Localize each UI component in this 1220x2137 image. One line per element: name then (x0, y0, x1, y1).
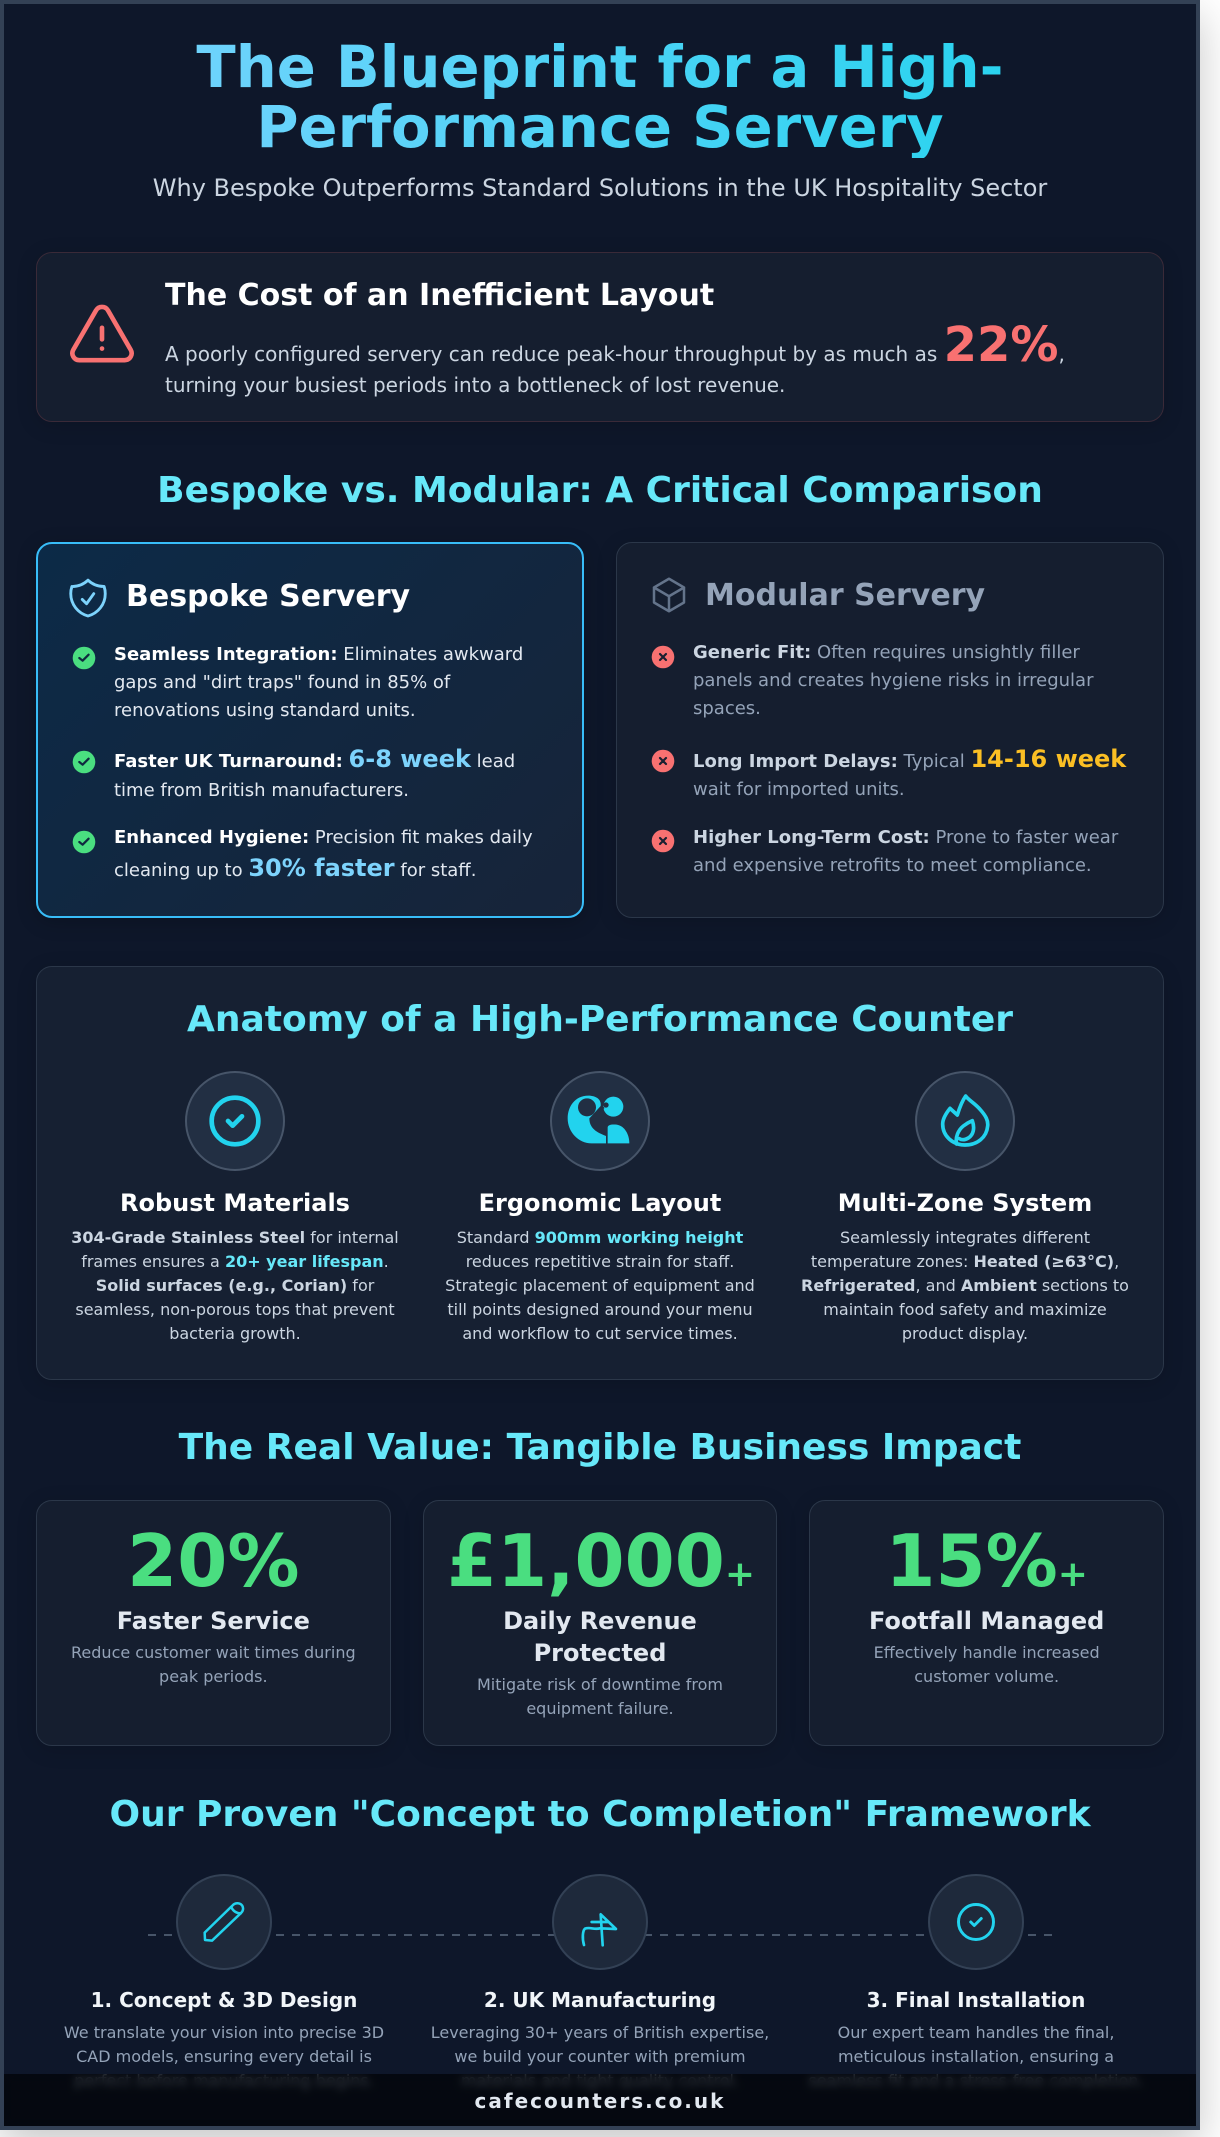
number: 15%+: 15%+ (885, 1519, 1088, 1603)
step: final installation (776, 1870, 1176, 2110)
icon: check (72, 750, 96, 774)
icon: warning triangle (70, 304, 134, 362)
text: step 1: perfect before manufacturing begins. (74, 2071, 374, 2090)
step: UK manufacturing (431, 1874, 769, 2090)
heading: real value: The Real Value: Tangible Business Impact (179, 1427, 1021, 1468)
text: generic fit (693, 642, 1094, 719)
stat card: daily revenue (423, 1500, 777, 1746)
icon: check (72, 646, 96, 670)
step: concept and design (64, 1874, 384, 2090)
text: step 3: meticulous installation, ensuring a (838, 2047, 1114, 2066)
feature: ergonomic layout (445, 1071, 755, 1343)
text: robust materials: seamless, non-porous tops that prevent (75, 1300, 395, 1319)
text: robust materials: frames ensures a 20+ year lifespan. (81, 1252, 389, 1271)
list item: faster UK turnaround (72, 745, 515, 801)
text: daily revenue: equipment failure. (526, 1699, 674, 1718)
text: seamless integration: renovations using standard units. (114, 700, 416, 721)
text: higher long-term cost: Higher Long-Term Cost: Prone to faster wear (693, 827, 1118, 848)
panel: modular servery (616, 542, 1164, 918)
text: long import delays: Long Import Delays: Typical 14-16 week (693, 745, 1126, 773)
heading: bespoke: Bespoke Servery (126, 579, 410, 614)
text: step 1: We translate your vision into precise 3D (64, 2023, 384, 2042)
number: £1,000+: £1,000+ (447, 1519, 755, 1603)
label: daily revenue protected (503, 1607, 697, 1667)
icon: manufacturing badge (552, 1874, 648, 1970)
text: enhanced hygiene: cleaning up to 30% faster for staff. (114, 854, 476, 882)
footer (4, 2074, 1196, 2126)
list item: generic fit (652, 642, 1094, 719)
icon: cube (652, 578, 686, 612)
subtitle: Why Bespoke Outperforms Standard Solutions in the UK Hospitality Sector (153, 174, 1047, 202)
text: faster service (71, 1643, 356, 1686)
text: ergonomic layout (445, 1228, 755, 1343)
heading: multi-zone system: Multi-Zone System (838, 1189, 1092, 1217)
text: ergonomic layout: Standard 900mm working height (457, 1228, 743, 1247)
text: step 3: Our expert team handles the final, (838, 2023, 1114, 2042)
text: footfall: Effectively handle increased (874, 1643, 1100, 1662)
icon: check circle badge (928, 1874, 1024, 1970)
text: faster UK turnaround (114, 745, 515, 801)
icon: cross (652, 646, 674, 668)
text: robust materials (71, 1228, 399, 1343)
text: higher long-term cost (693, 827, 1118, 876)
heading: ergonomic layout: Ergonomic Layout (479, 1189, 721, 1217)
icon: cross (652, 830, 674, 852)
text: robust materials: Solid surfaces (e.g., Corian) for (96, 1276, 374, 1295)
label: faster service: Faster Service (117, 1607, 310, 1635)
heading: step 3: 3. Final Installation (867, 1988, 1085, 2012)
text: footfall: customer volume. (914, 1667, 1059, 1686)
text: enhanced hygiene: Enhanced Hygiene: Precision fit makes daily (114, 827, 533, 848)
stat card: footfall (809, 1500, 1164, 1746)
text: multi-zone system: product display. (902, 1324, 1028, 1343)
stat card: faster service (36, 1500, 391, 1746)
icon: cross (652, 750, 674, 772)
heading: anatomy: Anatomy of a High-Performance Counter (187, 999, 1013, 1040)
label: daily revenue protected: Protected (534, 1639, 666, 1667)
text: daily revenue (477, 1675, 723, 1718)
text: step 1: CAD models, ensuring every detail is (76, 2047, 372, 2066)
icon: flame badge (915, 1071, 1015, 1171)
text: cost explanation: turning your busiest periods into a bottleneck of lost revenue. (165, 373, 785, 397)
text: step 2 (431, 2023, 769, 2090)
text: step 2: we build your counter with premium (454, 2047, 746, 2066)
heading: framework: Our Proven "Concept to Completion" Framework (109, 1794, 1091, 1835)
heading: modular: Modular Servery (705, 578, 985, 613)
text: multi-zone system (801, 1228, 1129, 1343)
title: Performance Servery (256, 94, 944, 161)
text: step 2: Leveraging 30+ years of British expertise, (431, 2023, 769, 2042)
heading: step 1: 1. Concept & 3D Design (91, 1988, 357, 2012)
text: multi-zone system: temperature zones: Heated (≥63°C), (811, 1252, 1119, 1271)
text: ergonomic layout: reduces repetitive strain for staff. (466, 1252, 734, 1271)
icon: check circle badge (185, 1071, 285, 1171)
feature: robust materials (71, 1071, 399, 1343)
list item: enhanced hygiene (72, 827, 533, 882)
label: footfall managed: Footfall Managed (869, 1607, 1104, 1635)
text: generic fit: Generic Fit: Often requires unsightly filler (693, 642, 1080, 663)
list item: long import delays (652, 745, 1127, 800)
text: ergonomic layout: and workflow to cut service times. (462, 1324, 738, 1343)
icon: shield check (69, 578, 107, 618)
text: step 3: seamless fit and a stress-free completion. (808, 2071, 1144, 2090)
panel: anatomy (36, 966, 1164, 1380)
text: robust materials: 304-Grade Stainless Steel for internal (71, 1228, 399, 1247)
text: generic fit: spaces. (693, 698, 761, 719)
text: long import delays: wait for imported units. (693, 779, 905, 800)
text: faster service: Reduce customer wait times during (71, 1643, 356, 1662)
text: daily revenue: Mitigate risk of downtime from (477, 1675, 723, 1694)
text: robust materials: bacteria growth. (169, 1324, 301, 1343)
text: faster UK turnaround: time from British manufacturers. (114, 780, 409, 801)
text: generic fit: panels and creates hygiene risks in irregular (693, 670, 1094, 691)
text: seamless integration: gaps and "dirt traps" found in 85% of (114, 672, 450, 693)
text: cost explanation: A poorly configured servery can reduce peak-hour throughput by as much as 22%, (165, 317, 1065, 373)
number: 20%: 20% (127, 1519, 300, 1603)
text: step 2: materials and tight quality control. (461, 2071, 739, 2090)
heading: robust materials: Robust Materials (120, 1189, 350, 1217)
title (196, 34, 1004, 161)
text: multi-zone system: Refrigerated, and Ambient sections to (801, 1276, 1129, 1295)
text: faster service: peak periods. (159, 1667, 268, 1686)
panel: cost of inefficient layout (36, 252, 1164, 422)
dashed connector (148, 1934, 1052, 1936)
text: step 1 (64, 2023, 384, 2090)
text: seamless integration: Seamless Integration: Eliminates awkward (114, 644, 523, 665)
list item: seamless integration (72, 644, 523, 721)
text: footfall (874, 1643, 1100, 1686)
heading: step 2: 2. UK Manufacturing (484, 1988, 716, 2012)
icon: people ergonomic badge (550, 1071, 650, 1171)
title: The Blueprint for a High- (196, 34, 1004, 101)
icon: pencil badge (176, 1874, 272, 1970)
panel: bespoke servery (36, 542, 584, 918)
text: faster UK turnaround: Faster UK Turnaround: 6-8 week lead (114, 745, 515, 773)
text: higher long-term cost: and expensive retrofits to meet compliance. (693, 855, 1092, 876)
footer: cafecounters.co.uk (475, 2089, 725, 2113)
text: long import delays (693, 745, 1127, 800)
text: multi-zone system: maintain food safety and maximize (823, 1300, 1107, 1319)
text: seamless integration (114, 644, 523, 721)
feature: multi-zone system (801, 1071, 1129, 1343)
heading: cost: The Cost of an Inefficient Layout (165, 278, 714, 313)
list item: higher long-term cost (652, 827, 1118, 876)
text: enhanced hygiene (114, 827, 533, 882)
text: ergonomic layout: till points designed around your menu (447, 1300, 753, 1319)
heading: comparison: Bespoke vs. Modular: A Critical Comparison (157, 470, 1043, 511)
text: multi-zone system: Seamlessly integrates different (840, 1228, 1090, 1247)
icon: check (72, 830, 96, 854)
text: step 3 (776, 2021, 1176, 2093)
label: daily revenue protected: Daily Revenue (503, 1607, 697, 1635)
text: ergonomic layout: Strategic placement of equipment and (445, 1276, 755, 1295)
